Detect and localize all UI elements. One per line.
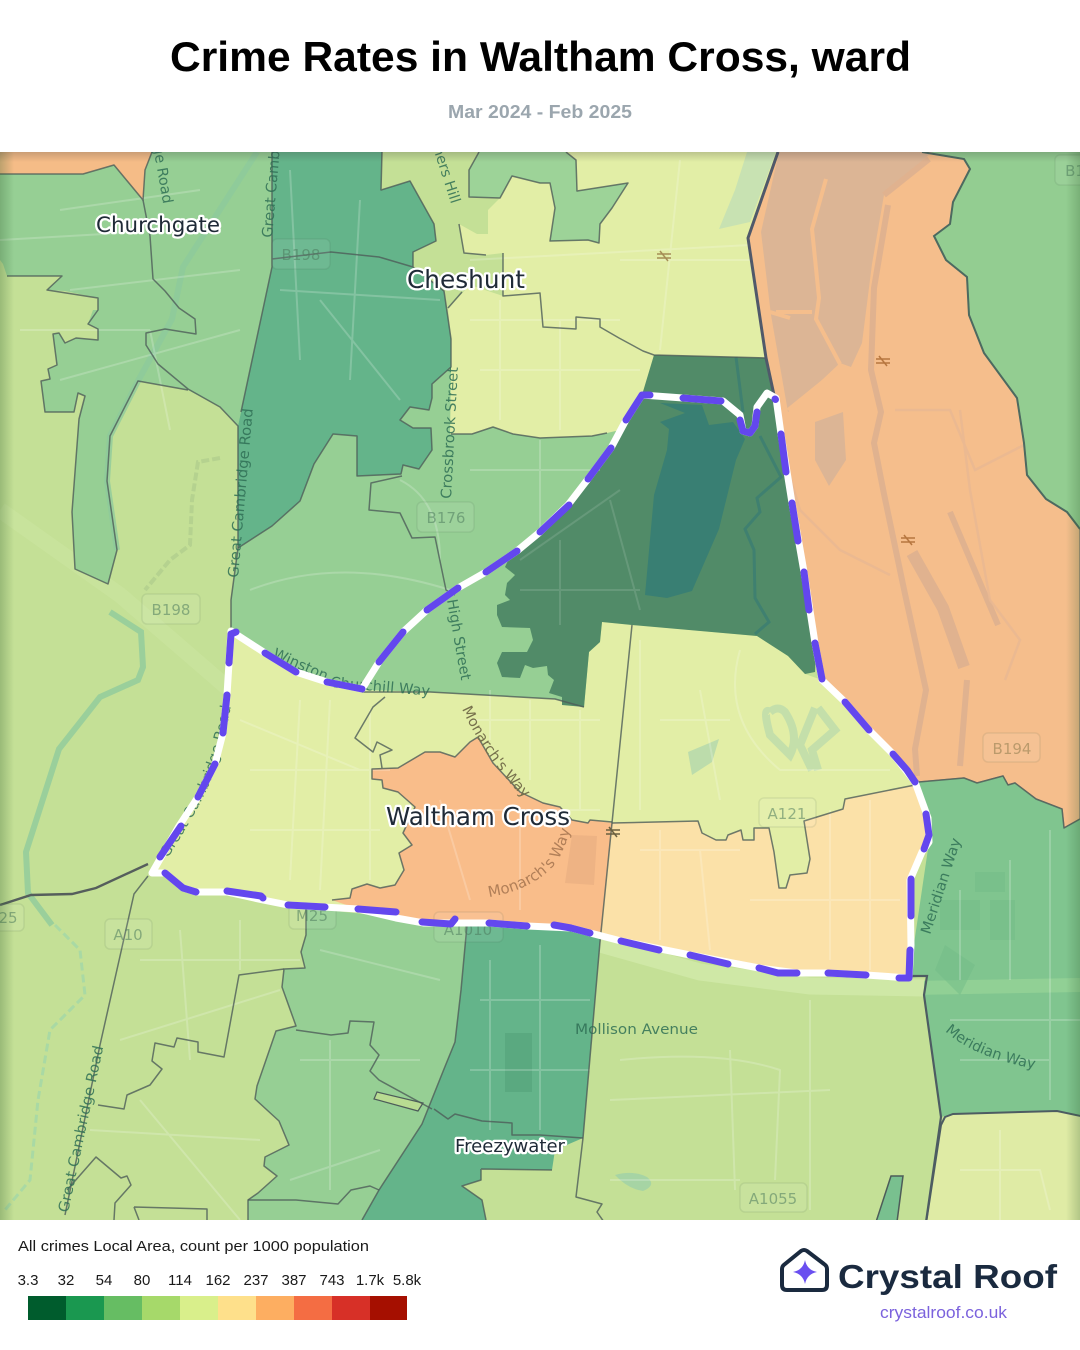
building patch south — [505, 1033, 532, 1092]
area: ward yellow — [158, 622, 923, 905]
boundary: central road line — [576, 625, 632, 1222]
shield: B198 west: B198 — [152, 601, 190, 619]
shield: A1055 — [740, 1183, 807, 1212]
area: east green — [932, 152, 1080, 527]
shield: B194: B194 — [993, 740, 1031, 758]
label: Great Camb (cropped): Great Cambridge — [260, 113, 287, 238]
legend scale labels: 743 — [319, 1272, 345, 1289]
label: Crossbrook Street: Crossbrook Street — [439, 366, 462, 499]
place label: Churchgate: Churchgate — [96, 213, 220, 237]
shield: A121: A121 — [768, 805, 806, 823]
legend colour bar — [28, 1296, 407, 1320]
building patch in orange area — [565, 835, 597, 885]
label: Great Cambridge Road south-west: Great Cambridge Road — [56, 1044, 107, 1214]
area: north green patch — [469, 152, 628, 243]
area: central mid green — [231, 367, 620, 707]
boundary: Great Cambridge Road south — [65, 876, 148, 1215]
legend scale labels: 80 — [134, 1272, 150, 1289]
boundary: Churchgate inner — [143, 200, 238, 631]
road labels — [58, 152, 1036, 1212]
subtitle: date range: Mar 2024 - Feb 2025 — [448, 102, 632, 122]
orange paths through tan zone — [770, 179, 840, 410]
area: Churchgate green — [0, 152, 272, 584]
label: Winston: Winston — [270, 646, 330, 684]
boundary: south-east — [909, 976, 941, 1222]
shield: A10: A10 — [113, 926, 143, 944]
legend scale labels: 114 — [168, 1272, 192, 1289]
shield: A1010: A1010 — [444, 921, 492, 939]
label: Great Cambridge Road north: Great Cambridge Road — [226, 408, 257, 578]
boundary: south-west lines — [98, 969, 284, 1109]
shield: B194 — [983, 733, 1040, 762]
legend — [18, 1238, 422, 1320]
small rectangle south — [374, 1092, 423, 1111]
area: base light green — [0, 152, 946, 1220]
label: Meridian Way south-east: Meridian Way — [946, 1024, 1036, 1070]
Crystal Roof logo — [782, 1250, 1058, 1322]
label: Churchill Way: Churchill Way — [330, 675, 431, 700]
label: High Street: High Street — [443, 598, 473, 682]
building shapes south-east — [946, 980, 968, 994]
label: Mollison Avenue: Mollison Avenue — [575, 1022, 698, 1038]
station icon 1 — [657, 251, 671, 261]
shield: B176 — [417, 502, 474, 532]
green footpath — [145, 458, 220, 590]
place label: Freezywater: Freezywater — [455, 1136, 566, 1157]
road shields — [0, 155, 1080, 1212]
lake south — [615, 1173, 651, 1191]
boundary: south mid outer — [248, 908, 306, 1220]
logo wordmark: Crystal Roof — [838, 1258, 1058, 1295]
boundary: north patch — [469, 152, 628, 243]
area: Freezywater green — [362, 925, 601, 1220]
shield: M25 — [289, 905, 336, 929]
legend title: All crimes Local Area, count per 1000 population — [18, 1238, 369, 1255]
boundary: orange west thick — [748, 152, 778, 395]
boundary: Waltham road line — [355, 692, 584, 768]
area: south-east green — [909, 776, 1080, 1117]
shield: B1 east — [1055, 155, 1080, 185]
area: south-east corner yellow — [925, 1111, 1080, 1230]
shield: A121 — [759, 798, 816, 827]
legend scale labels: 1.7k — [356, 1272, 385, 1289]
shield: B198 north — [272, 239, 330, 269]
title: Crime Rates in Waltham Cross, ward — [170, 33, 911, 80]
boundary: Freezywater — [362, 925, 583, 1220]
website URL: crystalroof.co.uk — [880, 1303, 1008, 1322]
double dashed route south-west — [5, 925, 85, 1210]
legend scale labels: 237 — [243, 1272, 269, 1289]
station icon 3 — [901, 535, 915, 545]
legend scale labels: 32 — [58, 1272, 74, 1289]
industrial zone tan — [761, 152, 932, 412]
rivers — [23, 382, 146, 927]
label: Monarch's Way south: Monarch's Way — [488, 828, 572, 897]
water: north lake — [719, 152, 776, 229]
boundary: Cheshunt north — [448, 224, 766, 358]
label: Meridian Way east: Meridian Way — [919, 836, 965, 936]
legend scale labels — [18, 1272, 422, 1289]
railway station icons — [606, 251, 915, 837]
place label: Waltham Cross: Waltham Cross — [386, 802, 570, 831]
shield: M25 west — [0, 904, 24, 931]
boundary lines — [0, 152, 1080, 1222]
boundary: inner Cheshunt — [369, 427, 607, 595]
motorway band west — [0, 510, 230, 690]
boundary: pale orange north — [612, 785, 915, 888]
shield: M25: M25 — [296, 907, 328, 925]
legend scale labels: 54 — [96, 1272, 112, 1289]
label: cropped Road: ge Road — [149, 144, 175, 205]
ward boundary purple dashes — [160, 395, 929, 978]
faint street network — [0, 160, 1080, 1220]
small strip green — [876, 1176, 903, 1222]
boundary: south-west lower — [67, 1157, 207, 1220]
place label: Cheshunt: Cheshunt — [407, 265, 525, 294]
icon: house with star — [782, 1250, 827, 1290]
water: reservoir — [645, 403, 745, 598]
area: south mid green — [248, 908, 467, 1220]
ward boundary white line — [152, 393, 929, 978]
legend scale labels: 162 — [205, 1272, 231, 1289]
area: Waltham Cross orange — [332, 737, 612, 932]
boundary: Churchgate outer — [0, 152, 188, 584]
shield: A10 — [105, 919, 152, 949]
boundary: Waltham orange outline — [332, 737, 612, 900]
boundary: thick M25 west — [0, 864, 148, 905]
area: Cheshunt yellow — [448, 152, 778, 440]
shield: B176: B176 — [427, 509, 465, 527]
shield: B198 north: B198 — [282, 246, 320, 264]
shield: A1055: A1055 — [749, 1190, 797, 1208]
band south of ward — [600, 944, 924, 988]
station icon 2 — [876, 356, 890, 366]
boundary: central dark — [238, 152, 451, 548]
legend scale labels: 5.8k — [393, 1272, 422, 1289]
park lake — [766, 708, 835, 770]
pond in park — [688, 739, 719, 775]
area: nature reserve dark green — [497, 355, 816, 707]
A-road band south-east — [912, 985, 1080, 988]
boundary: south mid inner — [248, 1021, 432, 1204]
legend scale labels: 387 — [281, 1272, 307, 1289]
legend scale labels: 3.3 — [18, 1272, 38, 1289]
label: Rivers Hill: ners Hill — [429, 144, 463, 206]
shield: B198 west — [142, 594, 200, 624]
shield: A1010 — [434, 912, 503, 942]
railway and road strips in orange — [871, 159, 998, 776]
station icon 4 — [606, 827, 620, 837]
map edge vignette — [0, 152, 1080, 1220]
label: Great Cambridge Road along ward: Great Cambridge Road — [161, 705, 231, 856]
boundary: east top — [922, 152, 1080, 529]
label: Monarch's Way north: Monarch's Way — [462, 706, 530, 797]
area: top-left orange — [0, 152, 152, 200]
area: Lea Valley orange — [748, 152, 1080, 828]
area: ward pale orange — [601, 785, 929, 978]
area: central-north dark green — [238, 152, 451, 548]
boundary: orange south — [919, 776, 1080, 828]
river through reserve — [736, 357, 781, 634]
